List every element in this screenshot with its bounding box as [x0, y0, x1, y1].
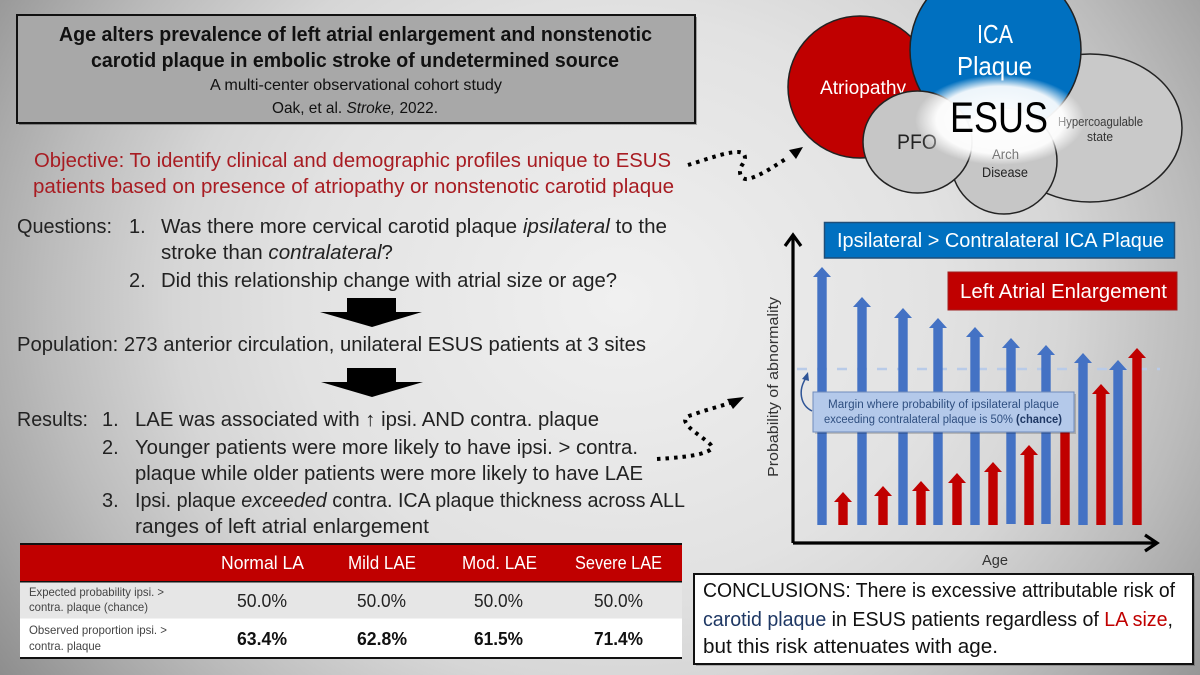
results — [17, 409, 685, 538]
table header: Severe LAE — [575, 553, 662, 573]
results: 1. — [102, 409, 119, 431]
y axis — [785, 235, 801, 543]
objective: Objective: To identify clinical and demographic profiles unique to ESUS — [34, 150, 671, 172]
row: observed proportion — [29, 623, 643, 653]
results table — [20, 543, 682, 659]
objective: patients based on presence of atriopathy or nonstenotic carotid plaque — [33, 176, 674, 198]
questions: stroke than contralateral? — [161, 242, 393, 264]
dotted arrow: objective to ESUS diagram — [688, 147, 803, 179]
y axis label: Probability of abnormality — [765, 296, 782, 477]
label: ICA plaque: Plaque — [957, 51, 1032, 81]
row: observed proportion: 63.4% — [237, 629, 287, 649]
conclusions box: but this risk attenuates with age. — [703, 636, 998, 658]
questions: Questions: — [17, 216, 112, 238]
ESUS venn diagram — [788, 0, 1182, 214]
legend: left atrial enlargement — [948, 272, 1177, 310]
label: PFO: PFO — [897, 131, 937, 154]
conclusions box: carotid plaque in ESUS patients regardless of LA size, — [703, 609, 1173, 631]
row: expected probability: 50.0% — [594, 591, 643, 611]
table header: Mod. LAE — [462, 553, 537, 573]
x axis — [793, 535, 1157, 551]
label: arch disease: Disease — [982, 164, 1028, 180]
results: 2. — [102, 437, 119, 459]
label: hypercoagulable state — [1058, 115, 1143, 144]
results: ranges of left atrial enlargement — [135, 516, 429, 538]
row: expected probability — [29, 585, 643, 614]
dashed 50% chance line — [797, 368, 1160, 370]
questions: Did this relationship change with atrial size or age? — [161, 270, 617, 292]
conclusions box — [694, 574, 1195, 666]
callout: 50% chance margin — [813, 392, 1076, 434]
objective — [33, 150, 674, 198]
label: ICA plaque: ICA — [977, 19, 1014, 49]
row: observed proportion: 71.4% — [594, 629, 643, 649]
blue arrows: ipsilateral greater than contralateral plaque — [813, 267, 1127, 525]
row: expected probability: contra. plaque (chance) — [29, 600, 148, 614]
population: Population: 273 anterior circulation, unilateral ESUS patients at 3 sites — [17, 334, 646, 356]
row: expected probability: 50.0% — [357, 591, 406, 611]
table header: Mild LAE — [348, 553, 416, 573]
row: observed proportion: 62.8% — [357, 629, 407, 649]
arrow: population to results — [321, 368, 423, 397]
callout: 50% chance margin: Margin where probability of ipsilateral plaque — [828, 399, 1059, 411]
legend: ipsilateral greater than contralateral: Ipsilateral > Contralateral ICA Plaque — [837, 230, 1164, 252]
arrow: questions to population — [320, 298, 422, 327]
label: atriopathy: Atriopathy — [820, 78, 907, 99]
row: observed proportion: Observed proportion ipsi. > — [29, 623, 167, 637]
circle: atriopathy — [788, 16, 932, 158]
questions: 2. — [129, 270, 146, 292]
table header — [221, 553, 662, 573]
title box: A multi-center observational cohort study — [210, 77, 502, 94]
results: Younger patients were more likely to have ipsi. > contra. — [135, 437, 638, 459]
results: 3. — [102, 490, 119, 512]
row: observed proportion: 61.5% — [474, 629, 523, 649]
results: plaque while older patients were more likely to have LAE — [135, 463, 643, 485]
questions: Was there more cervical carotid plaque ipsilateral to the — [161, 216, 667, 238]
title box: carotid plaque in embolic stroke of undetermined source — [91, 50, 619, 72]
results: Ipsi. plaque exceeded contra. ICA plaque thickness across ALL — [135, 490, 685, 512]
row: expected probability: 50.0% — [474, 591, 523, 611]
conclusions box: CONCLUSIONS: There is excessive attributable risk of — [703, 580, 1175, 602]
row: expected probability: 50.0% — [237, 591, 287, 611]
results: Results: — [17, 409, 88, 431]
title box: Oak, et al. Stroke, 2022. — [272, 100, 438, 117]
x axis label: Age — [982, 552, 1008, 569]
title box — [17, 15, 697, 125]
chart: probability of abnormality by age — [765, 222, 1177, 569]
row: observed proportion: contra. plaque — [29, 639, 101, 653]
questions — [17, 216, 667, 292]
circle: PFO — [863, 91, 972, 193]
circle: ICA plaque — [910, 0, 1081, 135]
label: arch disease — [982, 146, 1028, 180]
legend: ipsilateral greater than contralateral — [824, 222, 1174, 258]
red arrows: left atrial enlargement — [834, 348, 1146, 525]
curved arrow: callout to chance line — [801, 372, 812, 411]
row: expected probability: Expected probability ipsi. > — [29, 585, 164, 599]
circle: arch disease — [951, 108, 1057, 214]
label: arch disease: Arch — [992, 146, 1019, 162]
results: LAE was associated with ↑ ipsi. AND contra. plaque — [135, 409, 599, 431]
legend: left atrial enlargement: Left Atrial Enlargement — [960, 281, 1167, 303]
label: ICA plaque — [957, 19, 1032, 81]
central glow — [915, 75, 1085, 165]
dotted arrow: results to chart — [657, 397, 744, 459]
circle: hypercoagulable state — [998, 54, 1182, 202]
label: hypercoagulable state: state — [1087, 130, 1113, 144]
questions: 1. — [129, 216, 146, 238]
table header: Normal LA — [221, 553, 304, 573]
label: hypercoagulable state: Hypercoagulable — [1058, 115, 1143, 129]
callout: 50% chance margin: exceeding contralateral plaque is 50% (chance) — [824, 414, 1062, 426]
label: ESUS: ESUS — [950, 94, 1048, 142]
title box: Age alters prevalence of left atrial enlargement and nonstenotic — [59, 24, 652, 46]
